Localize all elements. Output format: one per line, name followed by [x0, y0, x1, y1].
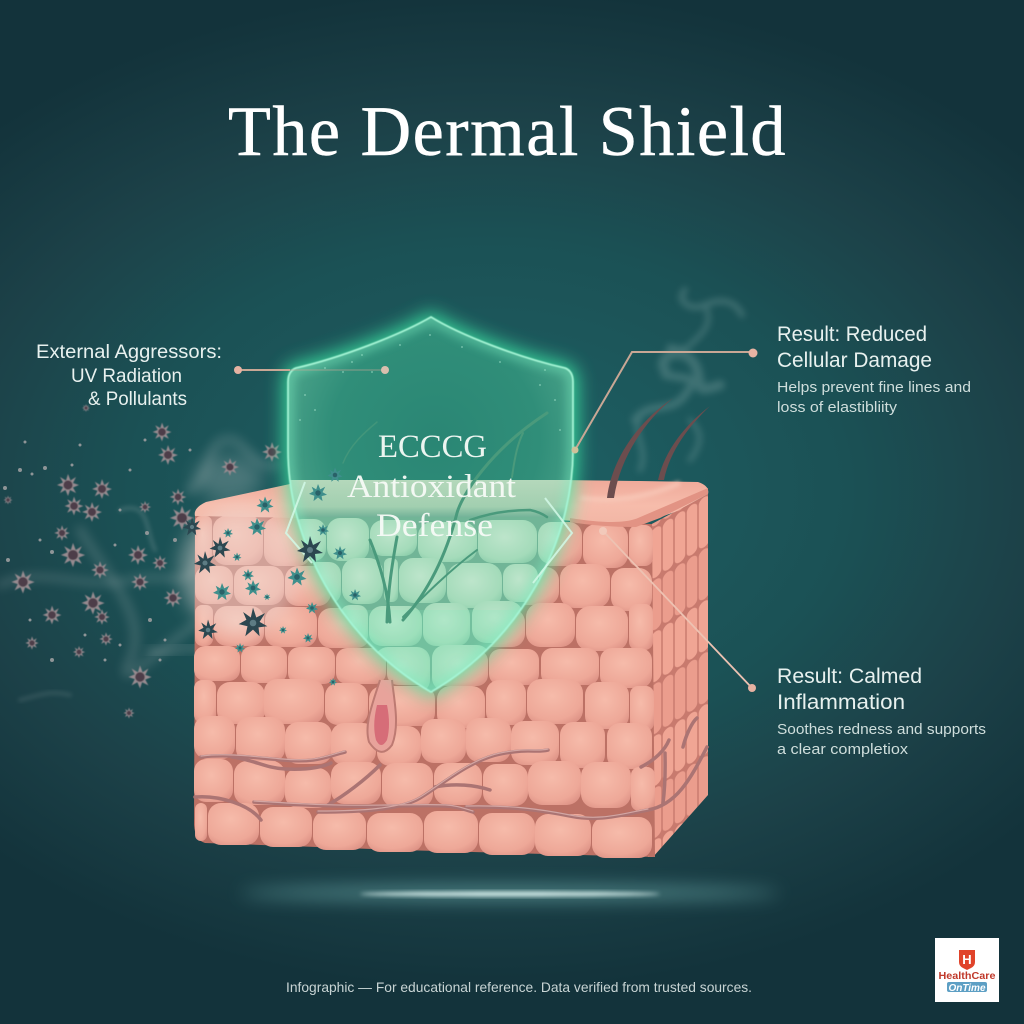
footer note: Infographic — For educational reference. Data verified from trusted sources. — [286, 979, 752, 995]
shield — [280, 310, 580, 697]
label: external aggressors — [36, 341, 222, 410]
shield label: Defense — [376, 508, 493, 544]
grey pollutant particles — [4, 404, 282, 718]
label: result calmed inflammation: Soothes redness and supports — [777, 721, 986, 738]
skin block — [180, 478, 708, 858]
dust haze over left of skin — [180, 505, 300, 635]
hairs — [607, 398, 710, 498]
shield label: Antioxidant — [347, 469, 516, 505]
shield speckles — [299, 334, 561, 431]
label: external aggressors: & Pollulants — [88, 388, 187, 410]
title: The Dermal Shield — [228, 93, 787, 171]
logo icon: H — [962, 952, 972, 967]
leader line: cellular damage — [572, 348, 758, 454]
cell backing seen through shield — [298, 518, 563, 691]
label: result calmed inflammation: a clear completiox — [777, 741, 909, 758]
shield interior — [280, 310, 580, 697]
smoke: rising wisps on the right — [635, 290, 742, 470]
shield upper body — [289, 319, 572, 480]
leader line: inflammation — [599, 527, 756, 692]
label: result reduced cellular damage — [777, 323, 971, 416]
logo on time badge: OnTime — [948, 983, 986, 994]
hair follicle — [367, 680, 396, 752]
tiny dust specks — [3, 438, 192, 662]
logo wordmark: HealthCare — [938, 970, 996, 982]
shield label — [347, 429, 516, 544]
label: result reduced cellular damage: Cellular Damage — [777, 349, 932, 372]
label: result calmed inflammation: Inflammation — [777, 691, 905, 714]
floor glow — [240, 886, 780, 900]
label: external aggressors: UV Radiation — [71, 365, 182, 387]
label: external aggressors: External Aggressors: — [36, 341, 222, 363]
skin front cells — [194, 516, 655, 858]
skin side face — [648, 494, 708, 857]
shield outer glow — [288, 317, 573, 692]
label: result reduced cellular damage: Helps prevent fine lines and — [777, 379, 971, 396]
cells seen through shield — [298, 518, 562, 688]
lower shield mint wash — [348, 610, 511, 684]
teal particles on skin — [183, 468, 361, 686]
shield hex wings — [286, 482, 572, 583]
label: result reduced cellular damage: loss of elastibliity — [777, 399, 898, 416]
label: result calmed inflammation: Result: Calmed — [777, 665, 922, 688]
nerve fibres — [195, 718, 707, 820]
shield inner glow — [288, 317, 573, 692]
skin band seen through shield — [280, 480, 580, 518]
nerve fibre highlights — [201, 749, 648, 817]
leader line: aggressors — [234, 366, 389, 374]
skin top surface — [195, 478, 708, 524]
skin front backing — [194, 512, 655, 857]
logo — [935, 938, 999, 1002]
shield rim — [288, 317, 573, 692]
label: result reduced cellular damage: Result: Reduced — [777, 323, 927, 346]
label: result calmed inflammation — [777, 665, 986, 758]
shield label: ECCCG — [378, 429, 487, 465]
hair seen through shield — [343, 413, 547, 622]
smoke: pollutant haze — [0, 440, 275, 700]
